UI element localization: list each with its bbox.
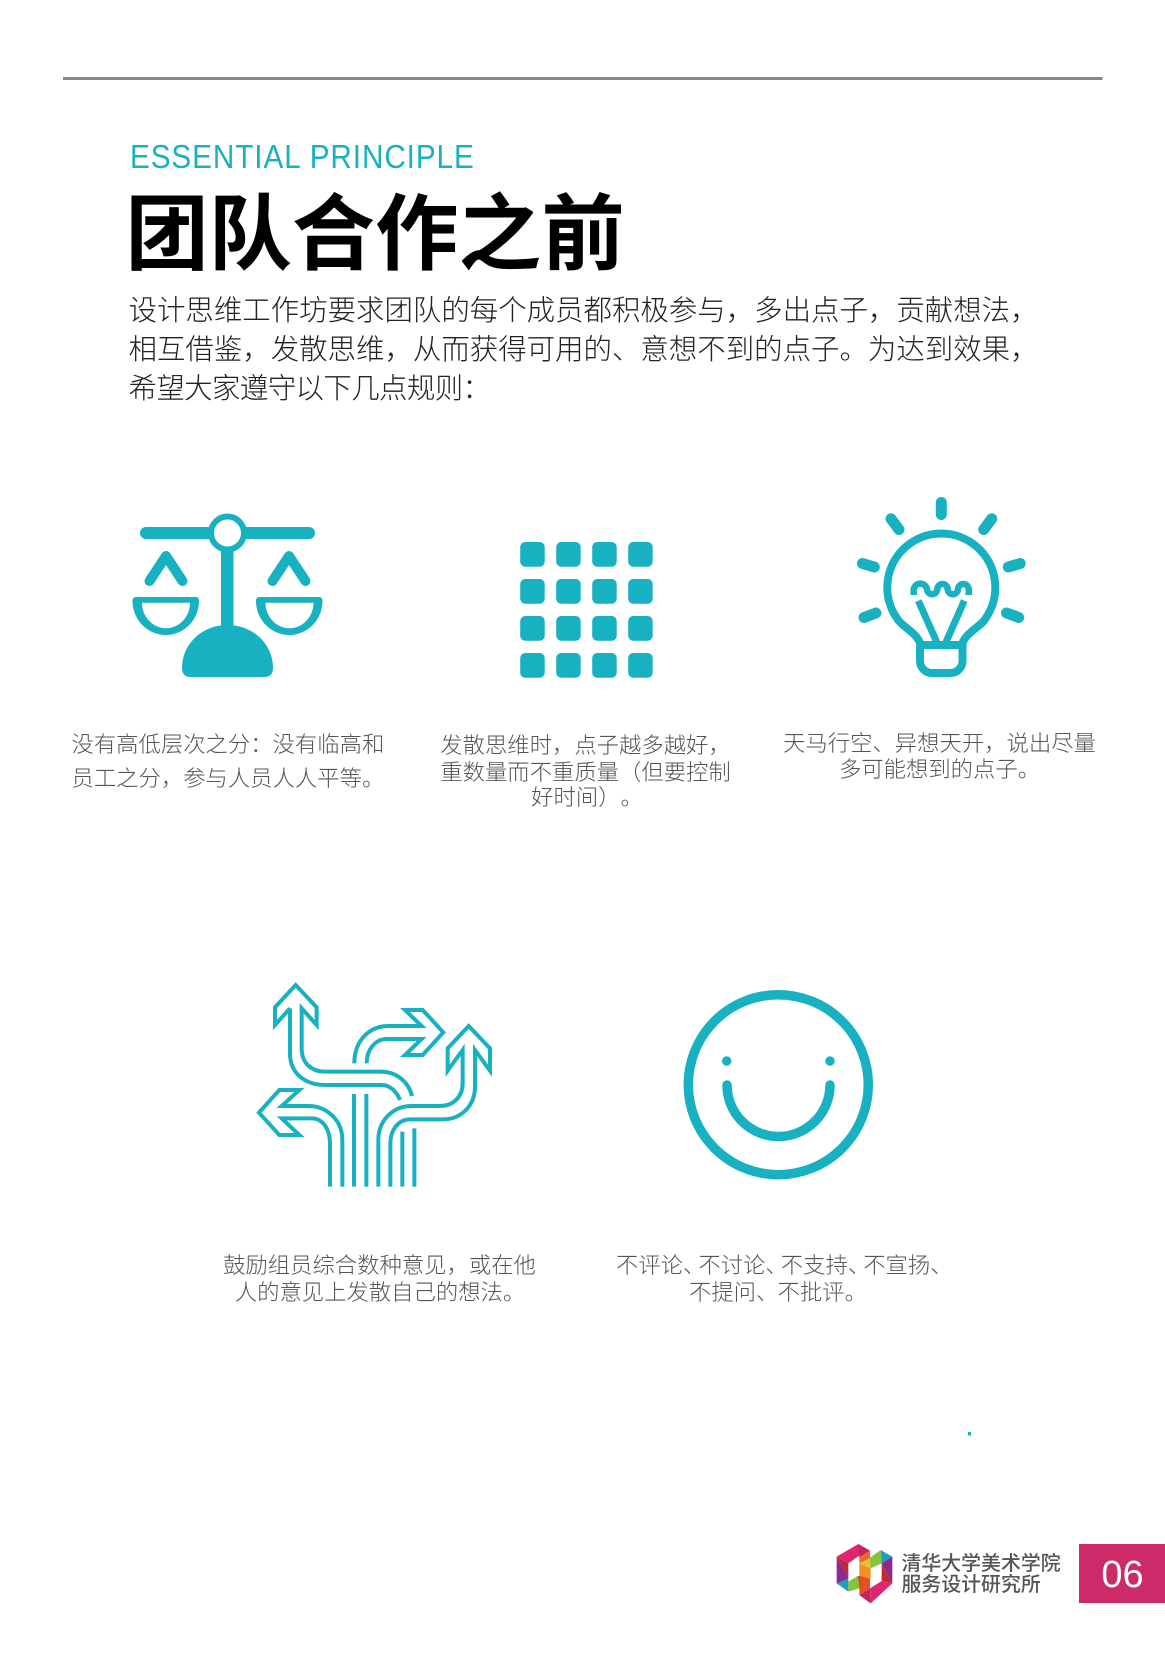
page number badge: 06 xyxy=(1101,1554,1144,1596)
caption: quantity over quality: 好时间）。 xyxy=(531,785,643,810)
caption: no hierarchy: 没有高低层次之分：没有临高和 xyxy=(72,732,384,757)
caption: no criticism: 不提问、 xyxy=(689,1280,778,1305)
intro text block: 设计思维工作坊要求团队的每个成员都积极参与，多出点子，贡献想法， xyxy=(128,295,1039,327)
logo text: 服务设计研究所 xyxy=(902,1573,1041,1596)
page number badge xyxy=(1079,1544,1165,1603)
caption: no criticism: 不宣扬、 xyxy=(863,1253,953,1278)
caption: quantity over quality: 重数量而不重质量（但要控制 xyxy=(440,760,731,785)
icon: smiley face xyxy=(688,995,868,1175)
logo: hexagon mark xyxy=(837,1544,892,1603)
icon: diverging arrows xyxy=(259,985,490,1187)
caption: no hierarchy: 员工之分，参与人员人人平等。 xyxy=(72,766,384,791)
logo text: 清华大学美术学院 xyxy=(902,1552,1061,1575)
caption: quantity over quality: 发散思维时，点子越多越好， xyxy=(440,733,731,758)
caption: combine opinions: 鼓励组员综合数种意见，或在他 xyxy=(223,1253,536,1278)
icon: grid of dots xyxy=(520,542,653,678)
intro text block: 相互借鉴，发散思维，从而获得可用的、意想不到的点子。为达到效果， xyxy=(128,334,1039,366)
caption: no criticism: 不批评。 xyxy=(778,1280,867,1305)
intro text block: 希望大家遵守以下几点规则： xyxy=(128,373,490,405)
title: 团队合作之前 xyxy=(126,188,625,281)
caption: no criticism: 不支持、 xyxy=(781,1253,870,1278)
eyebrow heading: ESSENTIAL PRINCIPLE xyxy=(130,139,474,175)
caption: no criticism: 不评论、 xyxy=(616,1253,705,1278)
icon: balance scale xyxy=(132,516,322,677)
caption: wild ideas: 多可能想到的点子。 xyxy=(839,757,1040,782)
caption: combine opinions: 人的意见上发散自己的想法。 xyxy=(235,1280,525,1305)
caption: no criticism: 不讨论、 xyxy=(698,1253,788,1278)
icon: light bulb xyxy=(862,502,1020,673)
caption: wild ideas: 天马行空、异想天开，说出尽量 xyxy=(783,731,1096,756)
